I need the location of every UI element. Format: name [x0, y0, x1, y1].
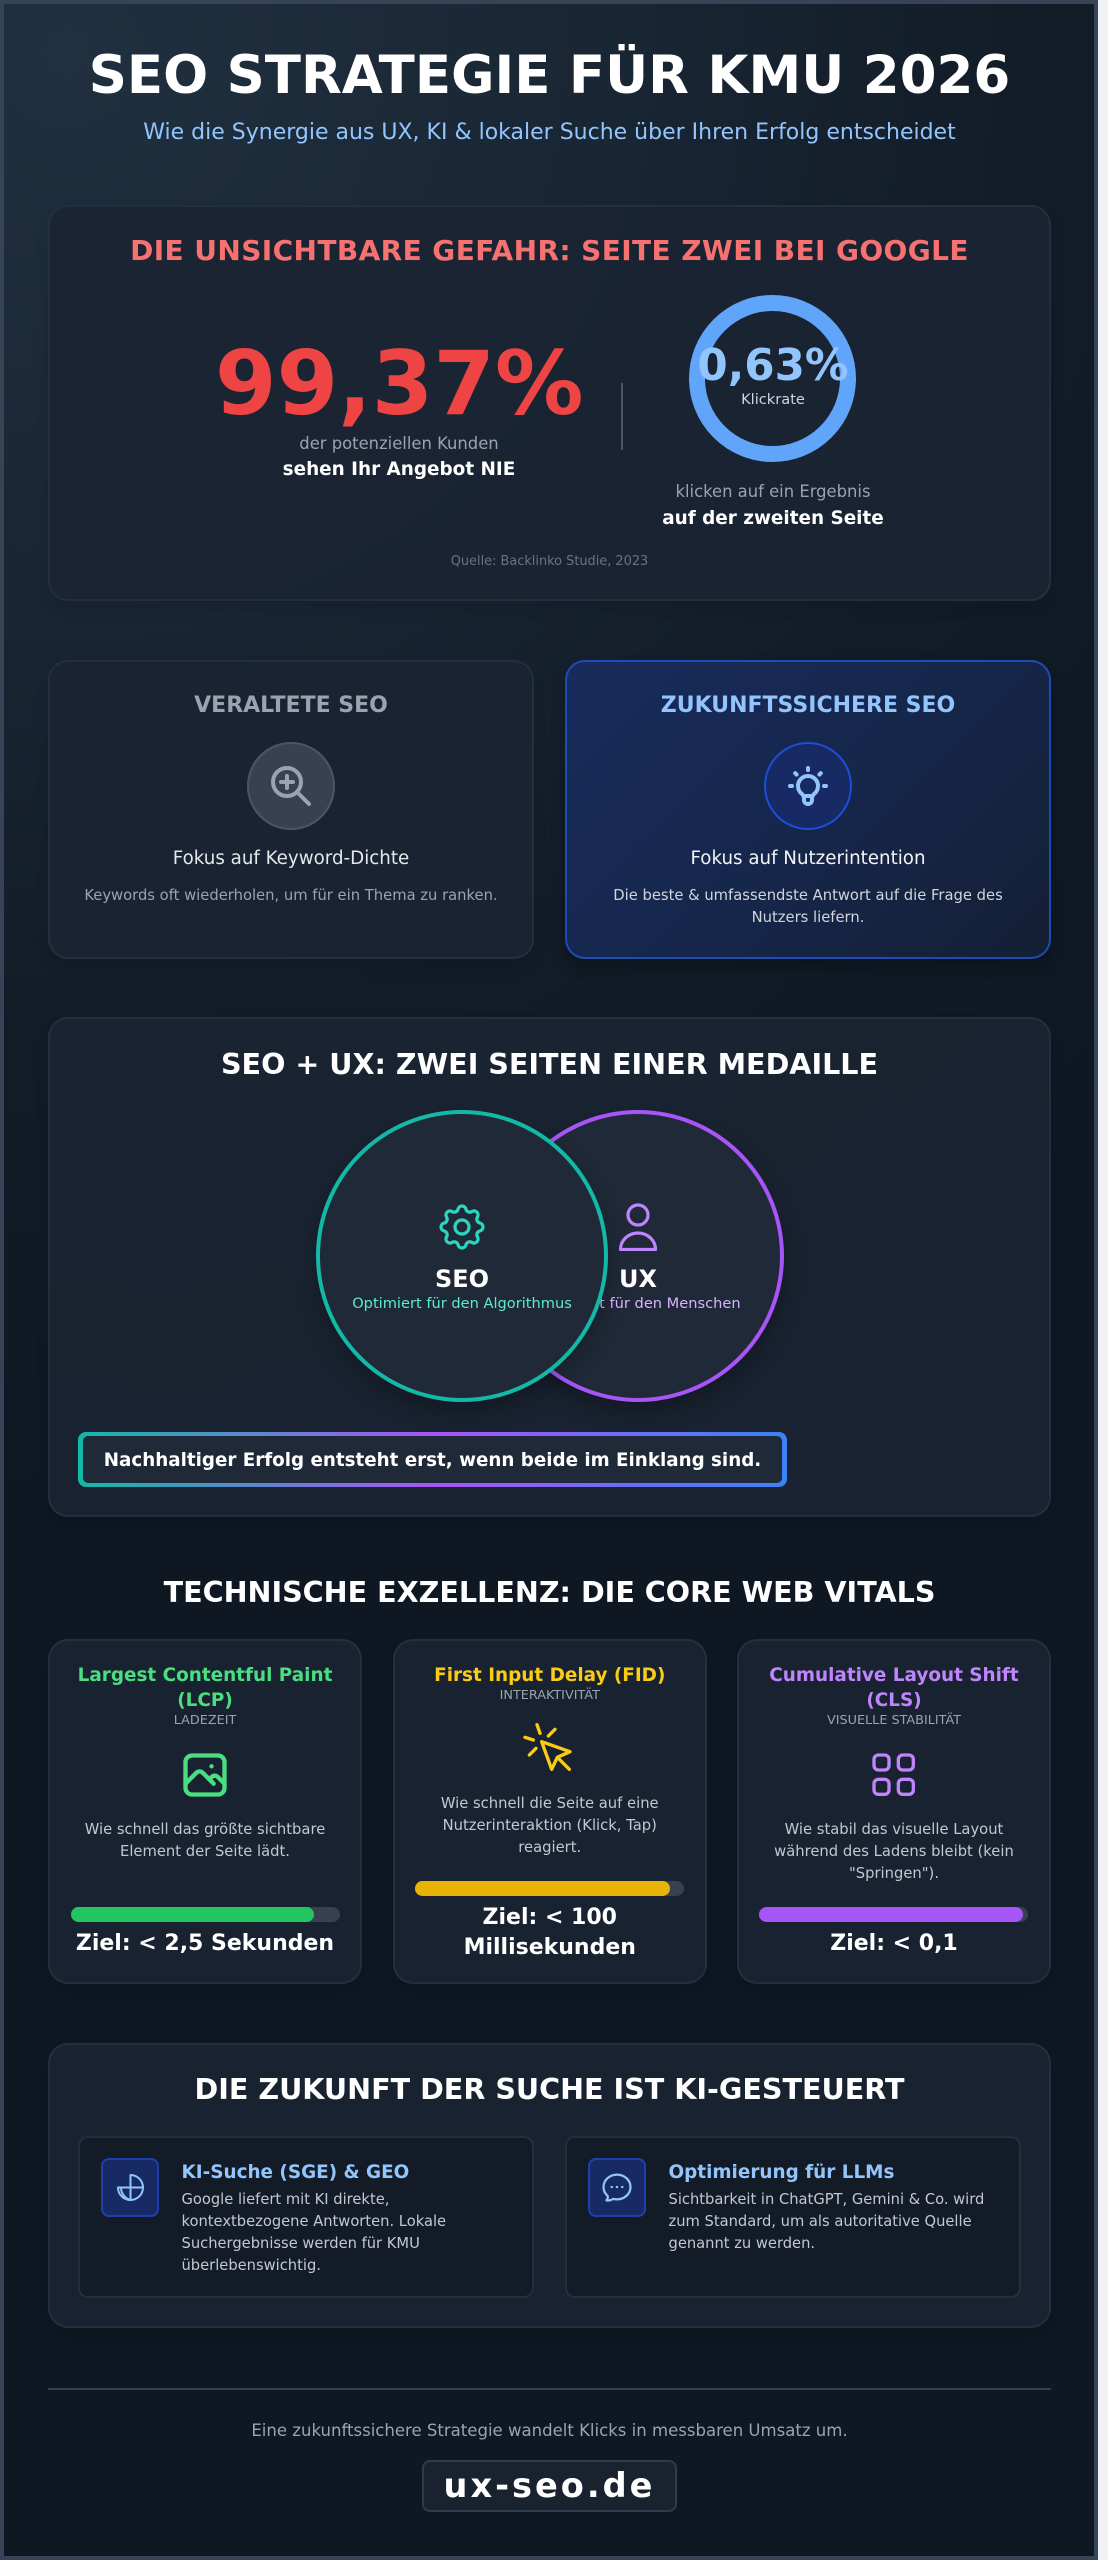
- card text: [182, 2190, 446, 2274]
- ring emphasis: auf der zweiten Seite: [662, 508, 884, 529]
- panel: SEO + UX: [48, 1017, 1051, 1517]
- footer badge: [422, 2460, 677, 2512]
- description: Keywords oft wiederholen, um für ein Thema zu ranken.: [84, 887, 498, 904]
- progress bar: [414, 1881, 684, 1896]
- description: Die beste & umfassendste Antwort auf die Frage des: [613, 887, 1003, 904]
- heading: VERALTETE SEO: [194, 693, 388, 718]
- SEO caption: Optimiert für den Algorithmus: [352, 1295, 572, 1312]
- icon: user: [618, 1203, 658, 1251]
- footer text: Eine zukunftssichere Strategie wandelt Klicks in messbaren Umsatz um.: [251, 2421, 848, 2440]
- card: AI search SGE: [78, 2136, 534, 2298]
- metric title: (LCP): [177, 1690, 233, 1710]
- card: LLM optimisation: [565, 2136, 1021, 2298]
- circle: SEO: [316, 1110, 608, 1402]
- metric category: LADEZEIT: [174, 1713, 236, 1728]
- UX label: UX: [619, 1265, 657, 1293]
- icon: chat bubble: [588, 2158, 646, 2217]
- card text: Sichtbarkeit in ChatGPT, Gemini & Co. wird: [668, 2190, 984, 2208]
- metric category: INTERAKTIVITÄT: [500, 1688, 600, 1703]
- title: SEO STRATEGIE FÜR KMU 2026: [89, 45, 1010, 106]
- icon: grid: [872, 1753, 915, 1796]
- website: ux-seo.de: [444, 2466, 655, 2505]
- metric title: (CLS): [866, 1690, 922, 1710]
- subtitle: Wie die Synergie aus UX, KI & lokaler Suche über Ihren Erfolg entscheidet: [143, 120, 956, 145]
- card text: zum Standard, um als autoritative Quelle: [668, 2212, 972, 2230]
- description: Wie schnell die Seite auf eine: [441, 1795, 659, 1812]
- heading: SEO + UX: ZWEI SEITEN EINER MEDAILLE: [221, 1047, 878, 1081]
- venn diagram: [316, 1110, 784, 1407]
- ring number: 0,63%: [697, 341, 849, 391]
- metric title: [769, 1664, 1019, 1710]
- card text: genannt zu werden.: [668, 2234, 815, 2252]
- panel: FID: [392, 1639, 707, 1984]
- callout: [78, 1432, 787, 1487]
- description: [441, 1795, 659, 1856]
- icon: gear: [439, 1204, 485, 1250]
- ring caption: klicken auf ein Ergebnis: [675, 482, 871, 501]
- heading: danger: DIE UNSICHTBARE GEFAHR: SEITE ZWEI BEI GOOGLE: [130, 234, 969, 267]
- panel: future-proof SEO: [565, 660, 1051, 959]
- panel: invisible danger: [48, 205, 1051, 601]
- description: [85, 1821, 325, 1860]
- card text: kontextbezogene Antworten. Lokale: [182, 2212, 446, 2230]
- metric title: Cumulative Layout Shift: [769, 1664, 1019, 1686]
- description: Element der Seite lädt.: [120, 1843, 290, 1860]
- card title: Optimierung für LLMs: [668, 2162, 894, 2183]
- target: Ziel: < 2,5 Sekunden: [76, 1931, 334, 1956]
- stat caption: der potenziellen Kunden: [299, 434, 499, 453]
- heading: ZUKUNFTSSICHERE SEO: [661, 693, 955, 718]
- description: Wie stabil das visuelle Layout: [785, 1821, 1003, 1838]
- panel: outdated SEO: [48, 660, 534, 959]
- metric title: First Input Delay (FID): [434, 1664, 665, 1686]
- target: [464, 1905, 636, 1960]
- SEO label: SEO: [435, 1265, 489, 1293]
- callout: Nachhaltiger Erfolg entsteht erst, wenn beide im Einklang sind.: [104, 1450, 761, 1471]
- stat emphasis: sehen Ihr Angebot NIE: [283, 459, 515, 480]
- metric title: [78, 1664, 332, 1710]
- ring label: Klickrate: [741, 391, 805, 408]
- icon: magnifier: [247, 742, 335, 830]
- description: "Springen").: [849, 1865, 939, 1882]
- description: Nutzerinteraktion (Klick, Tap): [443, 1817, 657, 1834]
- card text: Google liefert mit KI direkte,: [182, 2190, 389, 2208]
- panel: CLS: [737, 1639, 1051, 1984]
- target: Ziel: < 100: [483, 1905, 617, 1930]
- focus line: Fokus auf Nutzerintention: [690, 848, 926, 869]
- icon: image: [183, 1753, 227, 1797]
- heading: core web vitals: TECHNISCHE EXZELLENZ: DIE CORE WEB VITALS: [164, 1574, 935, 1608]
- divider: [621, 383, 623, 450]
- source: Quelle: Backlinko Studie, 2023: [451, 554, 648, 569]
- description: [774, 1821, 1014, 1882]
- description: Wie schnell das größte sichtbare: [85, 1821, 325, 1838]
- target: Ziel: < 0,1: [830, 1931, 958, 1956]
- panel: LCP: [48, 1639, 362, 1984]
- progress bar: [759, 1907, 1028, 1922]
- big number: 99,37%: [215, 332, 584, 435]
- description: Nutzers liefern.: [752, 909, 864, 926]
- description: während des Ladens bleibt (kein: [774, 1843, 1014, 1860]
- metric category: VISUELLE STABILITÄT: [827, 1713, 961, 1728]
- UX caption: Optimiert für den Menschen: [535, 1295, 741, 1312]
- focus line: Fokus auf Keyword-Dichte: [173, 848, 409, 869]
- ring: [689, 295, 856, 462]
- description: [613, 887, 1003, 926]
- description: reagiert.: [518, 1839, 581, 1856]
- heading: DIE ZUKUNFT DER SUCHE IST KI-GESTEUERT: [194, 2072, 905, 2106]
- circle: UX: [492, 1110, 784, 1402]
- stat: 99,37%: [215, 332, 584, 480]
- icon: light bulb: [764, 742, 852, 830]
- metric title: Largest Contentful Paint: [78, 1664, 332, 1686]
- stat: 0,63% ring: [662, 295, 884, 529]
- card text: überlebenswichtig.: [182, 2256, 321, 2274]
- icon: pie chart: [101, 2158, 159, 2217]
- card text: Suchergebnisse werden für KMU: [182, 2234, 420, 2252]
- card text: [668, 2190, 984, 2252]
- progress bar: [71, 1907, 340, 1922]
- target: Millisekunden: [464, 1934, 636, 1960]
- panel: AI search: [48, 2043, 1051, 2328]
- card title: KI-Suche (SGE) & GEO: [182, 2162, 409, 2183]
- icon: click cursor: [523, 1723, 572, 1772]
